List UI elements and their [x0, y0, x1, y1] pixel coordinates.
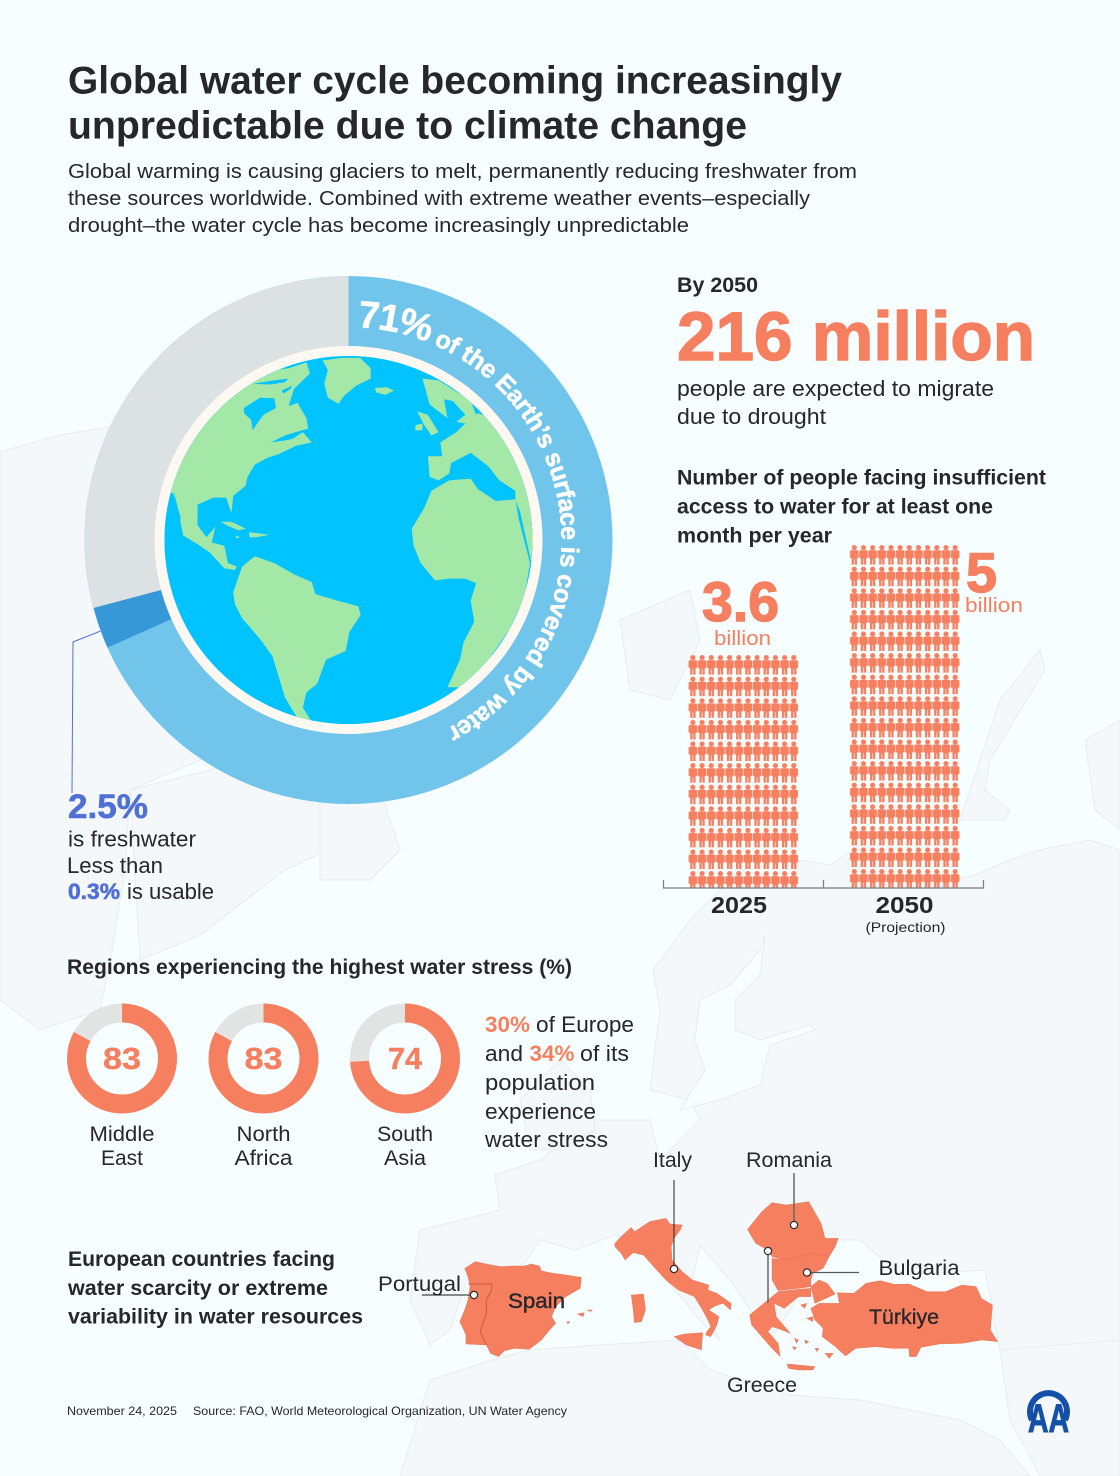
segment: land	[85, 276, 349, 608]
European countries heading: water scarcity or extreme	[67, 1277, 328, 1300]
freshwater callout: Less than	[67, 853, 163, 878]
subtitle text	[68, 160, 857, 237]
country labels: Spain	[508, 1290, 565, 1313]
pictogram column: 2025	[688, 655, 798, 888]
donut: North Africa 83	[218, 1013, 309, 1170]
European countries heading: European countries facing	[68, 1248, 335, 1271]
Iceland	[375, 387, 394, 395]
regions heading: Regions experiencing the highest water stress (%)	[67, 956, 572, 979]
value: 3.6 billion: 3.6	[702, 570, 779, 633]
donut: Middle East 83: 83	[103, 1041, 141, 1076]
migration stat: By 2050	[677, 274, 758, 297]
Spain and Portugal	[460, 1262, 581, 1357]
donut: North Africa 83: Africa	[234, 1147, 293, 1170]
pictogram column: 2050	[850, 545, 960, 888]
Hudson Bay	[244, 398, 276, 430]
Europe water stress text: 34%	[530, 1041, 574, 1066]
Baja peninsula gulf	[174, 491, 181, 523]
globe ring	[160, 351, 538, 729]
chart heading: month per year	[677, 524, 833, 548]
freshwater callout: 0.3%	[68, 879, 120, 904]
value: 5 billion: billion	[965, 595, 1023, 617]
Greece	[750, 1288, 811, 1357]
globe with continents	[164, 356, 532, 724]
Africa	[412, 479, 530, 687]
Arctic channels	[253, 379, 292, 393]
Romania	[748, 1202, 838, 1260]
logo: AA: AA	[1028, 1397, 1069, 1441]
logo: AA	[1028, 1393, 1069, 1441]
segment: water 71%	[84, 276, 612, 804]
year label: 2050 projection: 2050	[876, 892, 934, 918]
subtitle text: drought–the water cycle has become increasingly unpredictable	[68, 214, 689, 237]
European countries heading: variability in water resources	[68, 1306, 363, 1328]
marker dots	[470, 1221, 811, 1299]
Europe water stress text: water stress	[484, 1127, 608, 1152]
donut: Middle East 83: East	[101, 1147, 143, 1170]
country labels: Portugal	[378, 1273, 461, 1296]
Caribbean islands	[221, 522, 269, 538]
leader: Bulgaria	[807, 1272, 859, 1274]
year label: 2050 projection: (Projection)	[866, 919, 946, 935]
chart heading: Number of people facing insufficient	[677, 466, 1046, 490]
migration stat: due to drought	[677, 404, 826, 429]
leader line: freshwater	[72, 631, 100, 793]
Scandinavia	[422, 379, 476, 423]
freshwater callout: is usable	[127, 879, 214, 904]
donut: North Africa 83: North	[236, 1123, 290, 1146]
Europe water stress text	[484, 1012, 634, 1152]
donut: Middle East 83	[76, 1013, 168, 1170]
Bulgaria	[772, 1253, 829, 1291]
freshwater callout	[67, 788, 214, 904]
donut chart: earth surface	[84, 276, 612, 804]
subtitle text: these sources worldwide. Combined with extreme weather events–especially	[68, 187, 811, 210]
migration stat: people are expected to migrate	[677, 376, 994, 401]
Europe water stress text: and	[485, 1041, 523, 1066]
North America	[167, 362, 312, 570]
donut: Middle East 83: Middle	[90, 1123, 154, 1146]
country labels	[378, 1149, 960, 1397]
leader: Portugal	[422, 1294, 474, 1296]
British Isles	[415, 411, 439, 436]
title: Global water cycle becoming increasingly	[68, 60, 842, 102]
South America	[233, 556, 361, 722]
country labels: Bulgaria	[878, 1257, 960, 1280]
migration stat	[677, 274, 1035, 429]
chart heading: access to water for at least one	[677, 494, 993, 518]
footer: date and source: Source: FAO, World Meteorological Organization, UN Water Agency	[193, 1404, 567, 1418]
Italy	[615, 1218, 731, 1337]
title	[68, 60, 842, 148]
value: 5 billion	[965, 541, 1023, 617]
Portugal border	[468, 1284, 492, 1345]
European countries heading	[67, 1248, 363, 1328]
Greenland	[322, 358, 371, 404]
pictogram chart	[664, 541, 1023, 935]
background map of Europe and surroundings	[0, 425, 1120, 1476]
donut: South Asia 74: 74	[388, 1041, 423, 1076]
country labels: Greece	[727, 1374, 797, 1397]
donut: North Africa 83: 83	[244, 1041, 282, 1076]
value: 3.6 billion: billion	[714, 628, 771, 650]
map of European countries	[378, 1149, 998, 1397]
country labels: Italy	[653, 1149, 693, 1172]
freshwater callout: is freshwater	[68, 826, 196, 852]
Crete and Aegean islands	[787, 1303, 833, 1370]
Turkey	[811, 1280, 998, 1357]
value: 5 billion: 5	[966, 541, 997, 604]
Europe water stress text: experience	[485, 1099, 596, 1124]
segment: freshwater 2.5%	[94, 540, 348, 648]
Europe water stress text: 30%	[485, 1012, 530, 1037]
footer: date and source: November 24, 2025	[67, 1404, 177, 1418]
chart heading	[677, 466, 1046, 548]
country labels: Romania	[746, 1149, 832, 1172]
Europe water stress text: of its	[580, 1041, 629, 1066]
donut: South Asia 74: South	[377, 1123, 433, 1146]
Europe water stress text: of Europe	[536, 1012, 634, 1037]
leader: Greece	[767, 1251, 769, 1303]
Balearic islands	[567, 1310, 592, 1324]
axis	[664, 880, 984, 888]
donut: South Asia 74: Asia	[384, 1147, 426, 1170]
curved label: 71% of the Earth's surface is covered by water: 71% of the Earth’s surface is covered by water	[360, 300, 580, 741]
country labels: Türkiye	[869, 1306, 939, 1329]
Europe water stress text: population	[485, 1070, 595, 1095]
Europe and Middle East	[428, 413, 532, 562]
year label: 2050 projection	[866, 892, 946, 935]
freshwater callout: 2.5%	[68, 788, 148, 826]
Sicily	[674, 1333, 703, 1350]
year label: 2025: 2025	[711, 892, 767, 918]
Sardinia	[631, 1294, 646, 1323]
title: unpredictable due to climate change	[68, 104, 747, 148]
donut: South Asia 74	[360, 1013, 450, 1170]
leader: Italy	[673, 1180, 675, 1269]
migration stat: 216 million	[677, 298, 1035, 375]
subtitle text: Global warming is causing glaciers to melt, permanently reducing freshwater from	[68, 160, 857, 183]
leader: Romania	[793, 1173, 795, 1225]
